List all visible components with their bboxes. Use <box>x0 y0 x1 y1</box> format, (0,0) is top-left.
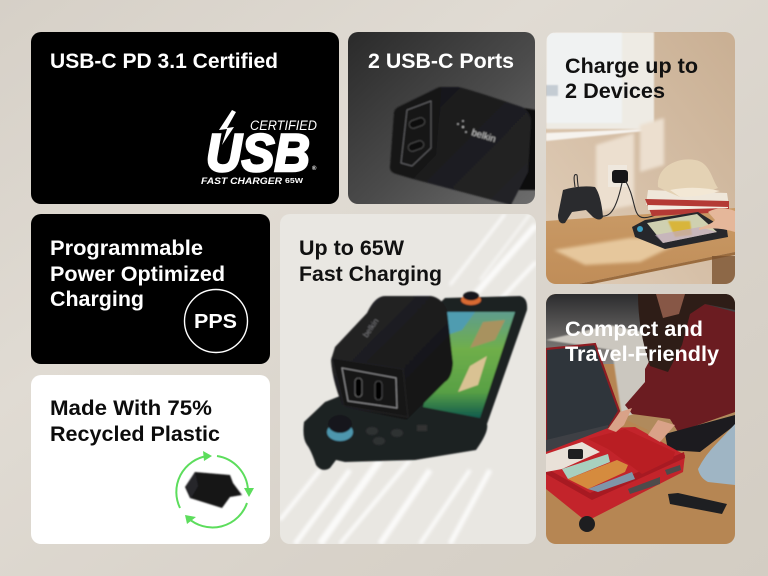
buttons <box>366 427 378 435</box>
panel: Programmable Power Optimized Charging <box>31 214 270 364</box>
heading: Made With 75% Recycled Plastic <box>50 396 220 446</box>
person face <box>656 294 685 318</box>
luggage handles <box>628 477 660 494</box>
folded clothes stack <box>546 442 600 472</box>
heading: Charge up to 2 Devices: 2 Devices <box>565 79 665 103</box>
heading: Programmable Power Optimized Charging <box>50 236 225 311</box>
icon: charger with two ports <box>390 87 536 205</box>
heading: Up to 65W Fast Charging <box>300 240 441 286</box>
desk <box>546 208 735 284</box>
heading: Made With 75% Recycled Plastic: Made With 75% <box>50 396 212 420</box>
game controller <box>558 186 603 223</box>
icon: certified USB fast charger logo: USB <box>206 124 310 183</box>
panel: Made With 75% Recycled Plastic <box>31 375 270 544</box>
hair <box>638 294 735 372</box>
illustration: charger plugged into handheld console <box>303 292 527 470</box>
jeans knee <box>698 424 735 485</box>
heading: Charge up to 2 Devices: Charge up to <box>565 54 698 78</box>
icon: PPS badge: PPS <box>194 311 237 333</box>
heading: Programmable Power Optimized Charging: Charging <box>50 287 144 311</box>
console body <box>303 296 527 470</box>
icon: recycling arrows around charger <box>176 451 254 527</box>
blue analog stick <box>327 423 353 441</box>
window <box>546 32 654 141</box>
orange analog stick <box>461 295 481 305</box>
hands <box>608 408 632 432</box>
panel: Compact and Travel-Friendly photo <box>546 294 735 544</box>
heading: Up to 65W Fast Charging: Up to 65W <box>299 236 405 260</box>
handheld on floor <box>668 493 727 514</box>
panel: Charge up to 2 Devices photo <box>546 32 735 284</box>
icon: certified USB fast charger logo: CERTIFIED <box>250 118 317 133</box>
heading: Compact and Travel-Friendly <box>565 317 719 366</box>
icon: certified USB fast charger logo: 65W <box>285 176 304 185</box>
heading: 2 USB-C Ports: 2 USB-C Ports <box>368 49 514 73</box>
illustration: charger plugged into handheld console: belkin <box>361 317 381 339</box>
hand <box>699 208 735 232</box>
icon: certified USB fast charger logo: ® <box>312 165 317 172</box>
heading: Programmable Power Optimized Charging: Programmable <box>50 236 203 260</box>
heading: Charge up to 2 Devices <box>566 58 698 98</box>
sofa <box>546 324 649 416</box>
icon: PPS badge <box>184 290 248 352</box>
icon: certified USB fast charger logo: FAST CHARGER <box>201 176 282 187</box>
panel: Up to 65W Fast Charging <box>280 214 536 544</box>
books <box>646 190 729 206</box>
charger <box>331 296 453 420</box>
heading: Compact and Travel-Friendly: Compact and <box>565 317 703 341</box>
heading: Compact and Travel-Friendly: Travel-Friendly <box>565 342 719 366</box>
hat <box>658 159 718 197</box>
wheel <box>579 516 595 532</box>
cables <box>574 174 656 218</box>
panel: 2 USB-C Ports <box>348 32 536 205</box>
heading: Programmable Power Optimized Charging: Power Optimized <box>50 262 225 286</box>
icon: charger with two ports: belkin <box>470 127 497 145</box>
dark trousers <box>665 415 735 452</box>
handheld console <box>632 212 728 249</box>
outlet and charger <box>608 165 627 187</box>
panel: USB-C PD 3.1 Certified <box>31 32 339 204</box>
suitcase lid <box>546 344 619 443</box>
heading: Made With 75% Recycled Plastic: Recycled Plastic <box>50 422 220 446</box>
person hoodie <box>625 304 735 432</box>
suitcase body <box>546 427 685 518</box>
red folded clothes <box>588 429 675 474</box>
heading: Up to 65W Fast Charging: Fast Charging <box>299 262 442 286</box>
heading: USB-C PD 3.1 Certified: USB-C PD 3.1 Certified <box>50 49 278 73</box>
sunlight patches on wall <box>596 118 664 212</box>
